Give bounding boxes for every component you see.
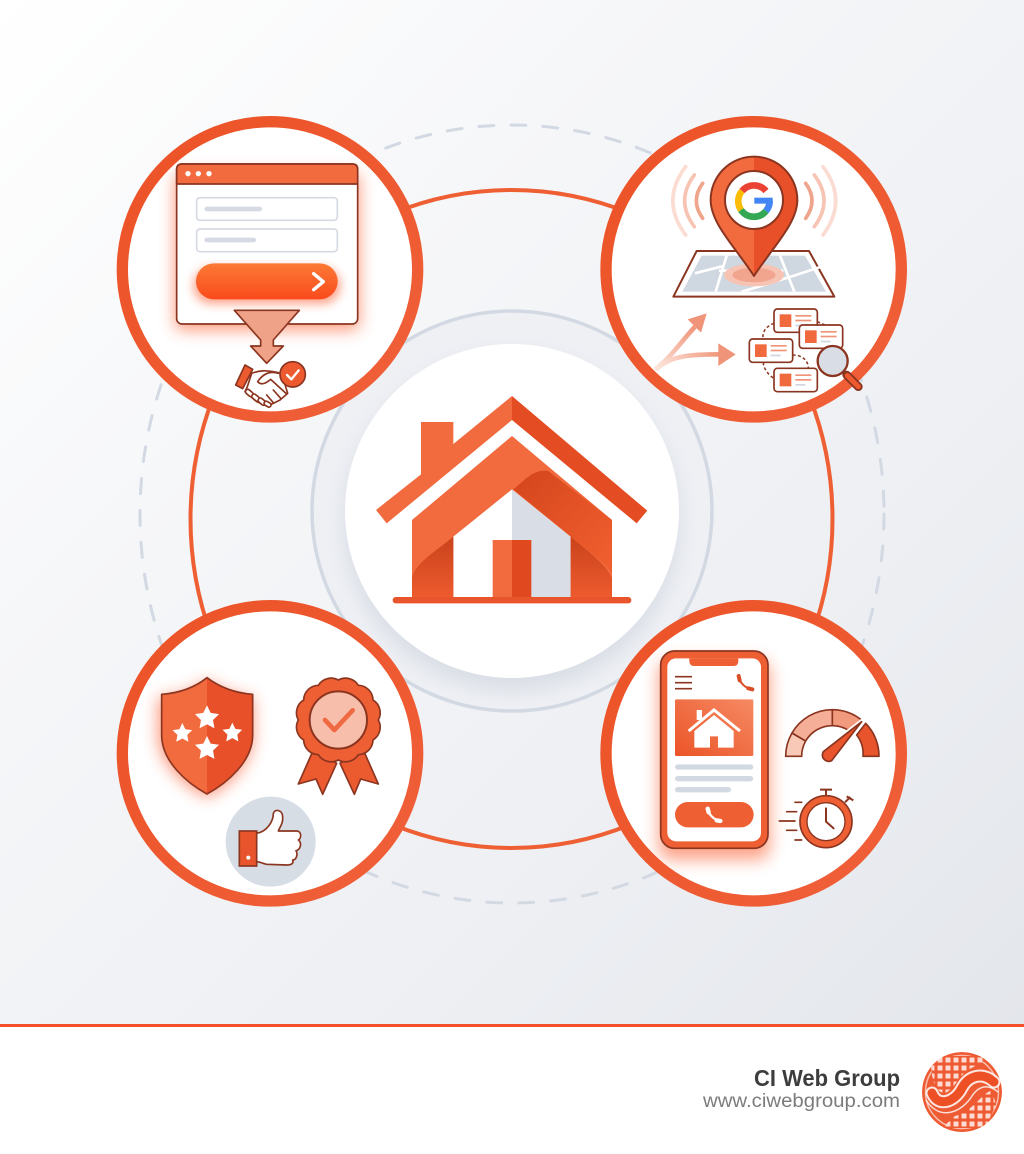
hub shadow bbox=[345, 356, 679, 690]
text lines bbox=[675, 764, 753, 792]
icon: speedometer bbox=[786, 710, 879, 762]
panel: trust and reviews bbox=[122, 606, 418, 901]
panel: local search bbox=[606, 122, 901, 417]
panel circle bbox=[606, 606, 901, 901]
logo bbox=[922, 1052, 1002, 1132]
orange connecting ring bbox=[190, 190, 832, 848]
footer background bbox=[0, 1026, 1024, 1154]
icon: smartphone bbox=[661, 651, 768, 848]
panel: lead capture form bbox=[122, 122, 418, 417]
business listing card three bbox=[749, 339, 793, 362]
outer dashed ring bbox=[140, 125, 884, 903]
map bbox=[673, 251, 834, 297]
house roof right bbox=[512, 396, 647, 523]
phone glow bbox=[658, 660, 770, 860]
house interior right wall bbox=[512, 489, 571, 597]
house right fold bbox=[571, 537, 612, 597]
form field two bbox=[197, 229, 337, 252]
hub white disc bbox=[345, 344, 679, 678]
house right roof shade bbox=[513, 471, 612, 573]
door bbox=[493, 540, 531, 600]
business listing card four bbox=[774, 368, 817, 392]
icon: thumbs up bbox=[226, 797, 316, 887]
dashed network links bbox=[763, 322, 825, 378]
panel: mobile site speed bbox=[606, 606, 901, 901]
icon: handshake bbox=[236, 362, 305, 408]
icon: house bbox=[376, 396, 647, 603]
icon: stopwatch bbox=[779, 790, 853, 848]
footer accent line bbox=[0, 1024, 1024, 1027]
house roof left with chimney bbox=[376, 396, 512, 523]
business listing card one bbox=[774, 309, 817, 332]
submit button glow bbox=[193, 267, 340, 304]
base line bbox=[393, 597, 631, 603]
phone icon bbox=[739, 676, 752, 689]
browser window bbox=[177, 164, 358, 324]
panel circle bbox=[122, 606, 418, 901]
call button bbox=[675, 802, 754, 827]
icon: shield with stars bbox=[162, 678, 253, 794]
submit button bbox=[196, 263, 338, 299]
hub outer ring bbox=[312, 311, 712, 711]
icon: Google G bbox=[738, 185, 773, 217]
window glow bbox=[175, 173, 359, 330]
shield glow bbox=[158, 681, 253, 797]
icon: white house bbox=[689, 710, 740, 748]
icon: funnel arrow bbox=[234, 310, 299, 363]
map pin bbox=[711, 157, 797, 276]
form field one bbox=[197, 198, 337, 220]
website: www.ciwebgroup.com bbox=[702, 1091, 900, 1112]
company name: CI Web Group bbox=[754, 1065, 900, 1091]
icon: magnifying glass bbox=[818, 346, 858, 387]
hero banner bbox=[675, 699, 753, 756]
footer bbox=[0, 1024, 1024, 1132]
center hub bbox=[312, 311, 712, 711]
house body bbox=[412, 436, 612, 597]
panel circle bbox=[606, 122, 901, 417]
signal waves bbox=[673, 167, 836, 235]
business listing card two bbox=[799, 325, 843, 348]
icon: award rosette bbox=[296, 678, 380, 794]
house left fold bbox=[412, 537, 453, 597]
growth arrows bbox=[655, 313, 736, 370]
panel circle bbox=[122, 122, 418, 417]
menu icon bbox=[675, 677, 692, 689]
house interior left wall bbox=[453, 489, 512, 597]
